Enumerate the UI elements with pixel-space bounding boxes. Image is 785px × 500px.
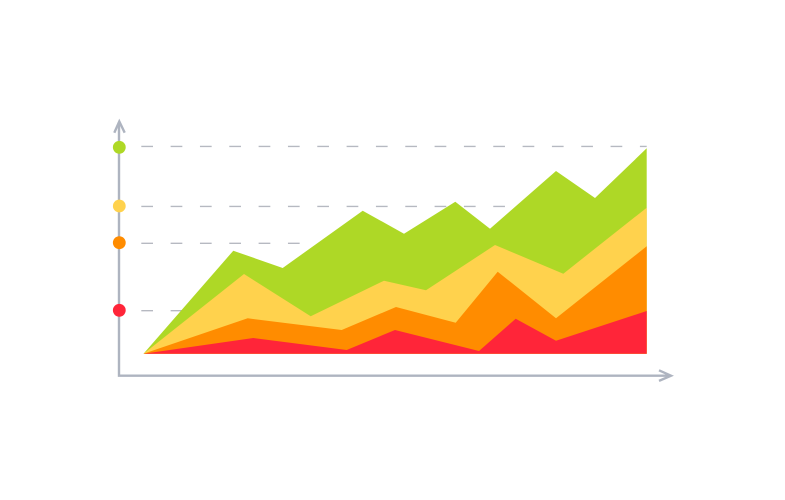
area chart bbox=[144, 148, 647, 354]
arrow: y axis bbox=[114, 122, 125, 133]
marker: red bbox=[113, 304, 126, 317]
area: orange series bbox=[144, 246, 647, 354]
area: yellow series bbox=[144, 208, 647, 354]
marker: yellow bbox=[113, 200, 126, 212]
y axis bbox=[119, 122, 670, 376]
arrow: x axis bbox=[659, 370, 671, 381]
axes with arrows bbox=[114, 122, 671, 381]
area: red series bbox=[144, 311, 647, 354]
marker: orange bbox=[113, 236, 126, 249]
legend markers bbox=[113, 141, 126, 317]
area: green series bbox=[144, 148, 647, 354]
marker: green bbox=[113, 141, 126, 154]
